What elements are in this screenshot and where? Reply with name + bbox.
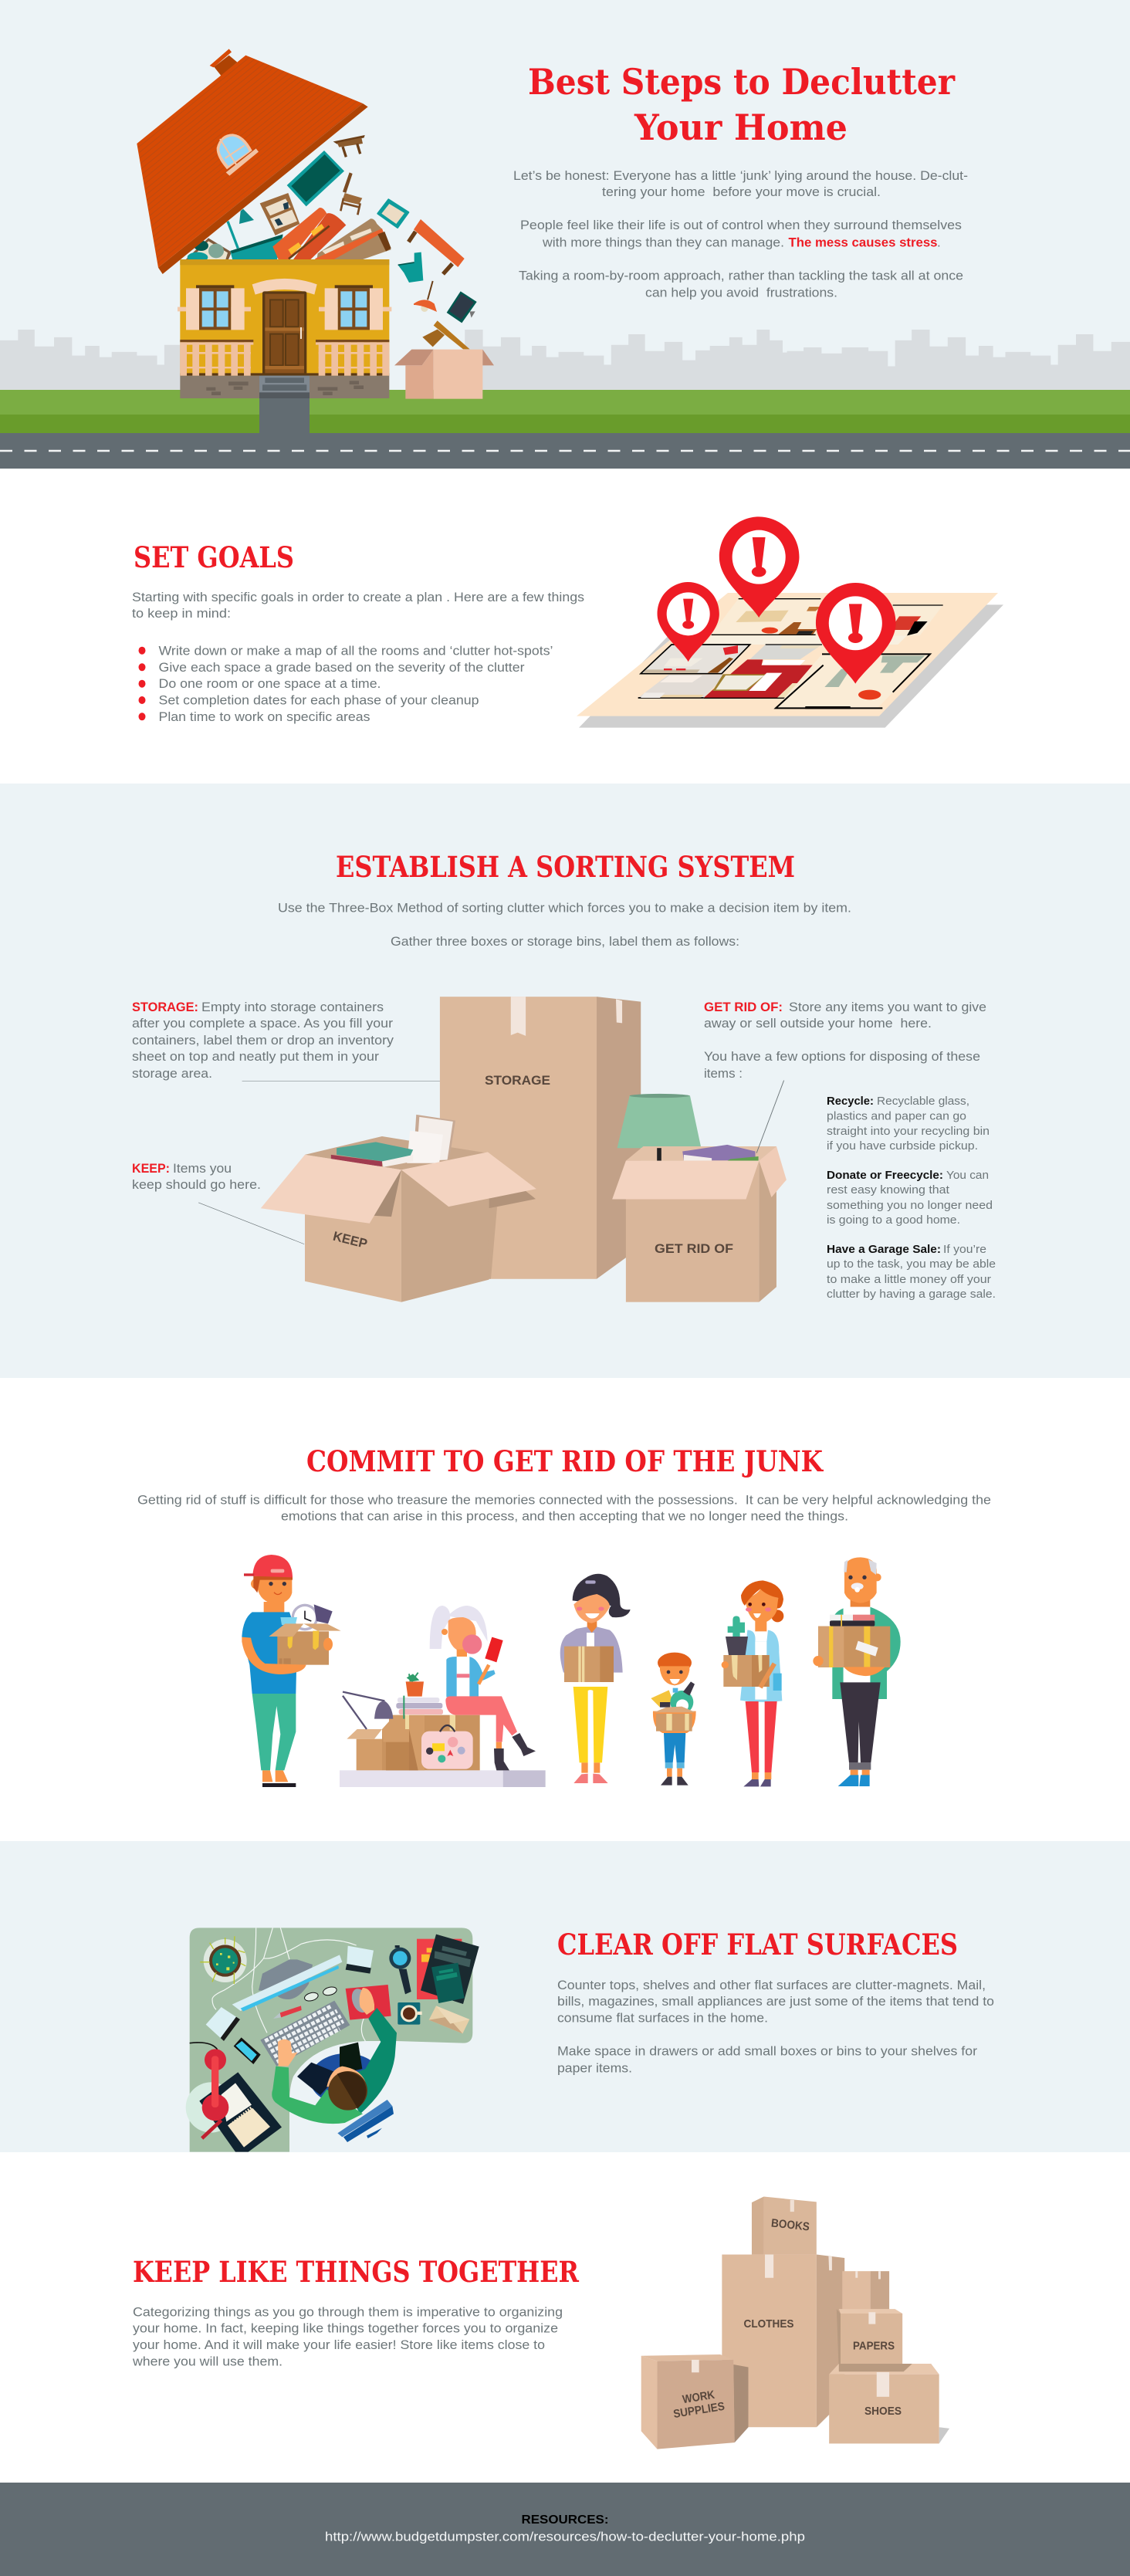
person: man with cap [242, 1555, 341, 1787]
flat surfaces text [557, 1978, 994, 2075]
intro text: Taking a room-by-room approach, rather than tackling the task all at once [519, 269, 963, 283]
grass [0, 390, 1130, 433]
heading: keep together: KEEP LIKE THINGS TOGETHER [133, 2255, 579, 2289]
box labels: SUPPLIES [672, 2400, 726, 2421]
flat surfaces text: Make space in drawers or add small boxes or bins to your shelves for [557, 2044, 977, 2058]
text: keep: Items you [173, 1161, 232, 1176]
sorting intro text: Gather three boxes or storage bins, label them as follows: [391, 934, 739, 949]
set goals intro text: to keep in mind: [132, 606, 231, 621]
callout lines [198, 1081, 784, 1244]
text: donate: You can [946, 1169, 989, 1182]
bullet list: Write down or make a map of all the rooms and ‘clutter hot-spots’ [159, 644, 553, 658]
box: top small [842, 2271, 889, 2311]
text: get rid of: You have a few options for disposing of these [704, 1049, 980, 1064]
desk illustration [186, 1928, 479, 2152]
box: clothes [722, 2255, 844, 2427]
pin 1 [719, 516, 799, 618]
text: get rid of: Store any items you want to give [789, 1000, 986, 1014]
skyline [0, 330, 1130, 390]
intro text [513, 168, 968, 300]
text: garage sale: If you’re [943, 1243, 986, 1256]
pin 3 [816, 583, 896, 684]
storage box [440, 997, 641, 1279]
box labels: PAPERS [853, 2339, 895, 2353]
icon: house illustration [137, 49, 494, 433]
person: old man [813, 1557, 901, 1786]
desk surface [190, 1928, 472, 2152]
commit text: emotions that can arise in this process, and then accepting that we no longer need the things. [281, 1508, 848, 1524]
panel: flat surfaces [0, 1841, 1130, 2152]
text: get rid of: GET RID OF: [704, 1000, 783, 1014]
person: woman with cactus [722, 1580, 783, 1786]
set goals intro text [132, 590, 584, 621]
intro text: . [937, 235, 941, 250]
flying furniture [184, 135, 477, 349]
keep together text: where you will use them. [132, 2354, 282, 2368]
people illustration: right group [651, 1557, 901, 1786]
text: donate: is going to a good home. [827, 1214, 960, 1227]
box labels: BOOKS [770, 2216, 810, 2234]
keep together text [132, 2305, 563, 2368]
text: garage sale: to make a little money off your [827, 1273, 991, 1286]
text: recycle: Recycle: [827, 1095, 874, 1108]
box labels: GET RID OF [655, 1241, 733, 1256]
heading: commit: COMMIT TO GET RID OF THE JUNK [306, 1444, 824, 1478]
keep together text: Categorizing things as you go through them is imperative to organizing [133, 2305, 563, 2319]
bullet list: Do one room or one space at a time. [159, 676, 381, 691]
text: recycle: if you have curbside pickup. [827, 1139, 978, 1153]
person at desk [272, 2008, 397, 2142]
intro text: can help you avoid frustrations. [645, 286, 837, 300]
box labels: CLOTHES [744, 2317, 793, 2331]
box labels: SHOES [864, 2405, 902, 2418]
text: storage: Empty into storage containers [201, 1000, 384, 1014]
heading: set goals: SET GOALS [134, 540, 294, 574]
text: storage: storage area. [132, 1066, 212, 1081]
person: woman in lilac jacket [560, 1574, 631, 1783]
text: recycle: Recyclable glass, [877, 1095, 969, 1108]
text: garage sale: up to the task, you may be able [827, 1258, 996, 1271]
sorting intro text: Use the Three-Box Method of sorting clutter which forces you to make a decision item by item. [278, 900, 851, 916]
title [528, 61, 956, 148]
lamp [617, 1094, 701, 1162]
desk items [186, 1928, 479, 2152]
panel: keep together [0, 2152, 1130, 2483]
house steps and path [259, 376, 310, 433]
text: donate: rest easy knowing that [827, 1183, 950, 1197]
house body [178, 259, 391, 398]
text: garage sale [827, 1243, 996, 1301]
text: keep: KEEP: [132, 1161, 170, 1176]
text: garage sale: Have a Garage Sale: [827, 1243, 941, 1256]
keep together text: your home. And it will make your life easier! Store like items close to [133, 2337, 545, 2352]
text: storage: sheet on top and neatly put them in your [132, 1049, 379, 1064]
text: recycle: plastics and paper can go [827, 1110, 966, 1122]
text: donate: something you no longer need [827, 1199, 993, 1212]
icon: floor plan sheet [577, 593, 1003, 728]
intro text: The mess causes stress [789, 235, 937, 250]
commit text: Getting rid of stuff is difficult for those who treasure the memories connected with the possessions. It can be very helpful acknowledging the [137, 1493, 991, 1507]
box labels [672, 2216, 902, 2421]
roof [137, 49, 368, 274]
panel: hero [0, 0, 1130, 469]
flat surfaces text: Counter tops, shelves and other flat surfaces are clutter-magnets. Mail, [557, 1978, 986, 1992]
text: donate: Donate or Freecycle: [827, 1169, 943, 1182]
panel: set goals [0, 469, 1130, 784]
pin 2 [658, 582, 719, 662]
boxes illustration [198, 997, 787, 1302]
text: donate [827, 1169, 993, 1227]
get rid of box [612, 1145, 787, 1302]
box labels: WORK [682, 2388, 716, 2406]
commit text [137, 1493, 991, 1524]
bullet list [139, 644, 553, 724]
text: recycle: straight into your recycling bin [827, 1125, 990, 1138]
text: storage: after you complete a space. As you fill your [132, 1016, 393, 1031]
set goals intro text: Starting with specific goals in order to create a plan . Here are a few things [132, 590, 584, 604]
intro text: with more things than they can manage. [542, 235, 784, 250]
text: keep: keep should go here. [132, 1177, 261, 1192]
keep box [261, 1115, 536, 1302]
title: Best Steps to Declutter [528, 61, 956, 103]
text: get rid of [704, 1000, 986, 1081]
text: garage sale: clutter by having a garage sale. [827, 1288, 996, 1301]
heading: sorting system: ESTABLISH A SORTING SYSTEM [336, 850, 795, 884]
text: keep [132, 1161, 261, 1192]
road [0, 433, 1130, 469]
flat surfaces text: consume flat surfaces in the home. [557, 2010, 768, 2026]
box: shoes [829, 2364, 949, 2443]
person: girl on boxes [340, 1606, 546, 1787]
stacked boxes [641, 2197, 949, 2449]
text: get rid of: away or sell outside your home here. [704, 1016, 932, 1031]
text: get rid of: items : [704, 1066, 743, 1081]
box labels: STORAGE [485, 1073, 550, 1088]
panel: sorting system [0, 784, 1130, 1378]
intro text: Let’s be honest: Everyone has a little ‘junk’ lying around the house. De-clut- [513, 168, 968, 183]
keep together text: your home. In fact, keeping like things together forces you to organize [133, 2320, 558, 2336]
panel: footer resources [0, 2483, 1130, 2576]
panel: commit [0, 1378, 1130, 1841]
resources label: RESOURCES: [522, 2513, 608, 2527]
people illustration [242, 1555, 631, 1787]
box: work supplies [641, 2354, 748, 2449]
intro text: People feel like their life is out of control when they surround themselves [520, 218, 962, 232]
title: Your Home [634, 107, 848, 148]
person: child [651, 1653, 696, 1786]
box labels: KEEP [332, 1229, 369, 1251]
text: storage [132, 1000, 394, 1081]
box labels [332, 1073, 733, 1256]
text: recycle [827, 1095, 990, 1153]
bullet list: Give each space a grade based on the severity of the clutter [159, 660, 525, 675]
box: books [752, 2197, 817, 2255]
moving box [394, 350, 494, 399]
intro text: tering your home before your move is crucial. [602, 184, 881, 199]
flat surfaces text: bills, magazines, small appliances are just some of the items that tend to [557, 1994, 994, 2009]
bullet list: Set completion dates for each phase of your cleanup [159, 693, 479, 707]
text: storage: STORAGE: [132, 1000, 198, 1014]
sorting intro text [278, 900, 851, 949]
text: storage: containers, label them or drop an inventory [132, 1033, 394, 1048]
bullet list: Plan time to work on specific areas [159, 709, 370, 724]
heading: flat surfaces: CLEAR OFF FLAT SURFACES [557, 1928, 958, 1962]
flat surfaces text: paper items. [557, 2061, 632, 2075]
box: papers [837, 2309, 902, 2371]
resources url: http://www.budgetdumpster.com/resources/how-to-declutter-your-home.php [325, 2529, 805, 2544]
